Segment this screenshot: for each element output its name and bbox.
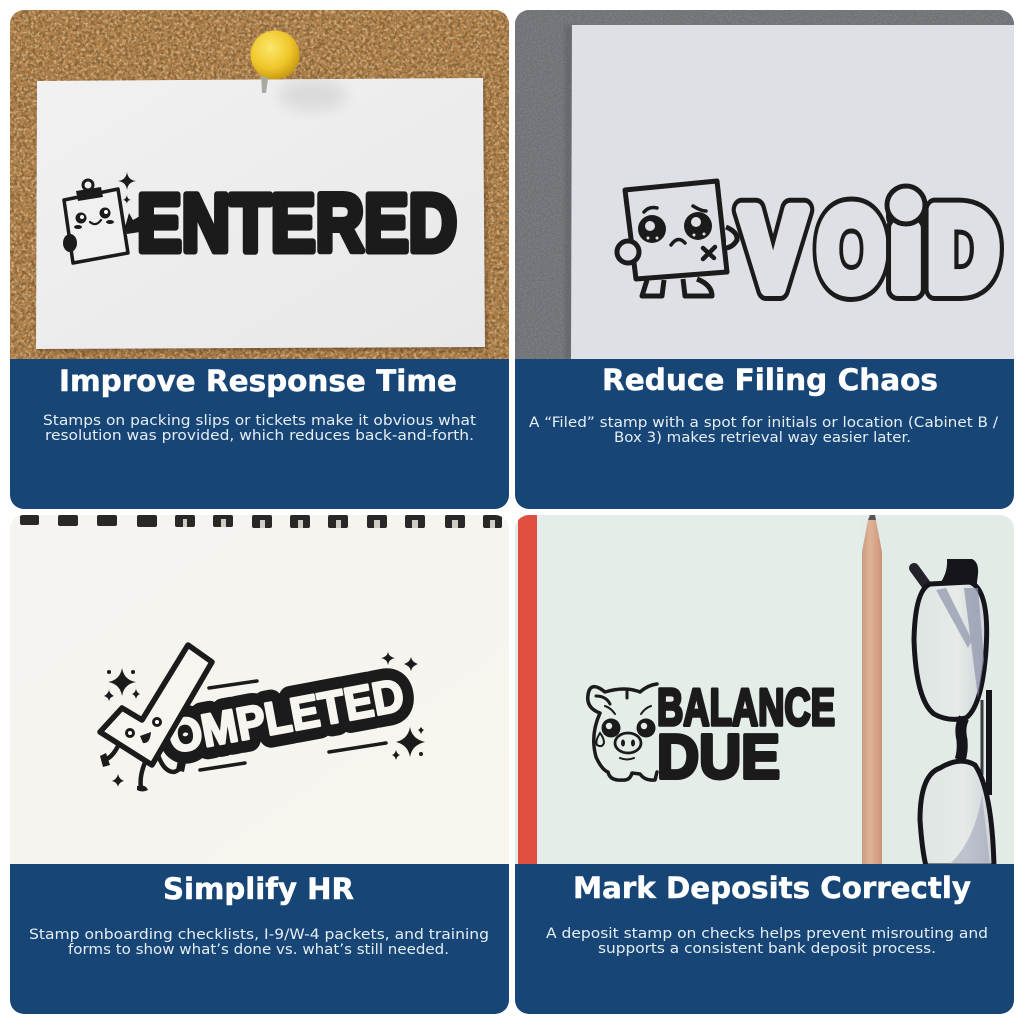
body text: Box 3) makes retrieval way easier later.	[614, 430, 911, 446]
stamp: sad square mascot	[617, 181, 737, 296]
spiral binding rings	[20, 515, 502, 528]
caption band	[515, 864, 1014, 1014]
stamp word: VOiD: V	[741, 186, 805, 314]
photo: note card pinned to cork board	[10, 10, 509, 359]
stamp word: VOiD: i	[890, 186, 922, 314]
heading: Improve Response Time	[59, 364, 457, 398]
icon: glasses	[914, 559, 994, 866]
panel: Improve Response Time	[10, 10, 509, 509]
stamp word: VOiD: i	[890, 186, 922, 314]
photo: spiral notebook page	[10, 515, 509, 864]
body text: Stamp onboarding checklists, I-9/W-4 packets, and training	[29, 927, 489, 943]
panel: Reduce Filing Chaos	[515, 10, 1014, 509]
heading: Simplify HR	[163, 872, 354, 906]
body text	[43, 413, 476, 444]
stamp word: BALANCE DUE: DUE	[657, 723, 780, 792]
caption band	[10, 864, 509, 1014]
body text	[529, 415, 998, 446]
body text: supports a consistent bank deposit process.	[598, 941, 936, 957]
panel: Simplify HR	[10, 515, 509, 1014]
body text: A “Filed” stamp with a spot for initials or location (Cabinet B /	[529, 415, 998, 431]
stamp word: VOiD: D	[928, 186, 998, 314]
stamp word: BALANCE DUE	[657, 679, 835, 792]
stamp: clipboard mascot	[63, 172, 140, 263]
body text: forms to show what’s done vs. what’s still needed.	[68, 942, 449, 958]
stamp word: VOiD: O	[818, 186, 885, 314]
heading: Mark Deposits Correctly	[573, 871, 971, 905]
stamp word: VOiD: D	[928, 186, 998, 314]
decorative sparkles and speed lines	[104, 652, 425, 787]
stamp word: OMPLETED: OMPLETED	[164, 668, 408, 763]
body text: A deposit stamp on checks helps prevent misrouting and	[546, 926, 988, 942]
stamp word: VOiD	[741, 186, 998, 314]
icon: yellow push pin	[250, 30, 300, 93]
photo: paper on grey concrete	[515, 10, 1014, 359]
stamp: check mark mascot	[100, 645, 212, 792]
stamp: crying piggy bank	[588, 684, 657, 780]
caption band	[10, 359, 509, 509]
stamp word: ENTERED: ENTERED	[137, 178, 457, 269]
panel: Mark Deposits Correctly	[515, 515, 1014, 1014]
body text: resolution was provided, which reduces back-and-forth.	[45, 428, 474, 444]
icon: pencil	[862, 515, 882, 864]
body text	[546, 926, 988, 957]
heading: Reduce Filing Chaos	[602, 363, 938, 397]
stamp word: BALANCE DUE: BALANCE	[657, 679, 835, 737]
photo: notebook, pencil and glasses	[515, 515, 1014, 866]
stamp word: OMPLETED: OMPLETED	[164, 668, 408, 763]
caption band	[515, 359, 1014, 509]
stamp word: VOiD: V	[741, 186, 805, 314]
body text: Stamps on packing slips or tickets make it obvious what	[43, 413, 476, 429]
stamp word: VOiD: O	[818, 186, 885, 314]
body text	[29, 927, 489, 958]
